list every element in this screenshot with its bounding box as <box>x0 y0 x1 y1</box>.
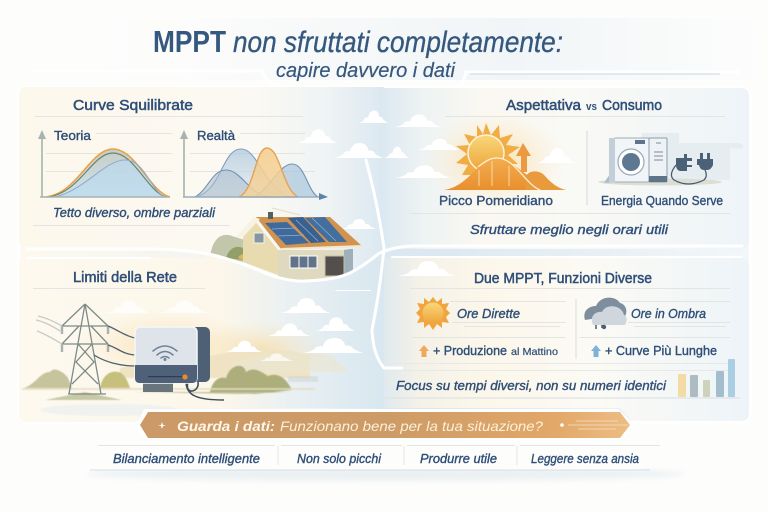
white dividing curves <box>27 160 742 368</box>
title: MPPT <box>153 24 226 59</box>
clouds: upper right <box>384 114 576 178</box>
heading: limiti della rete: Limiti della Rete <box>73 270 177 286</box>
landscape <box>22 349 350 416</box>
clouds: upper centre <box>297 110 388 229</box>
illustration: house with solar panels <box>205 208 378 290</box>
caption: focus su tempi diversi: Focus su tempi diversi, non su numeri identici <box>396 378 667 393</box>
banner: guarda i dati <box>136 409 634 440</box>
panel: curve squilibrate <box>19 87 384 281</box>
column: ore dirette <box>412 297 566 358</box>
icon: washer, appliance and plugs <box>598 133 743 186</box>
chart: small bars <box>678 359 735 397</box>
heading: curve squilibrate: Curve Squilibrate <box>73 98 193 114</box>
panel: due mppt <box>384 258 749 421</box>
label: ore dirette: Ore Dirette <box>457 306 520 321</box>
item: non solo picchi: Non solo picchi <box>297 451 382 466</box>
main panel backdrop <box>19 87 750 422</box>
item: leggere senza ansia: Leggere senza ansia <box>531 451 639 466</box>
icon: sun and hill <box>423 112 567 208</box>
icon: rain cloud <box>584 298 627 329</box>
label: produzione al mattino <box>433 343 558 358</box>
label: produzione al mattino: al Mattino <box>511 346 558 358</box>
text: banner message: Guarda i dati: <box>177 418 275 434</box>
chart: teoria <box>38 128 172 197</box>
clouds: lower left <box>105 272 372 361</box>
icon: orange arrow <box>419 345 429 357</box>
column: ore in ombra <box>580 298 730 358</box>
panel: limiti della rete <box>19 257 384 422</box>
caption: sfruttare meglio: Sfruttare meglio negli orari utili <box>470 222 669 237</box>
heading: due mppt: Due MPPT, Funzioni Diverse <box>474 271 652 287</box>
title: non sfruttati completamente: <box>233 26 563 59</box>
heading: aspettativa vs consumo: vs <box>586 101 597 113</box>
chart: realtà: Realtà <box>197 128 236 143</box>
item: bilanciamento intelligente: Bilanciamento intelligente <box>113 451 260 466</box>
panel: title plate <box>30 18 768 88</box>
chart: teoria: Teoria <box>54 128 92 143</box>
heading: aspettativa vs consumo: Consumo <box>602 98 662 114</box>
title <box>153 24 563 59</box>
caption: tetto diverso: Tetto diverso, ombre parziali <box>53 205 216 220</box>
icon: inverter with wifi <box>135 327 224 400</box>
label: produzione al mattino: + Produzione <box>433 343 507 358</box>
text: banner message: Funzionano bene per la tua situazione? <box>280 418 543 434</box>
item: produrre utile: Produrre utile <box>420 451 497 466</box>
icon: power pylon <box>36 304 135 394</box>
footer row: four key points <box>85 446 685 481</box>
cloud: top of panel <box>398 261 455 276</box>
heading: aspettativa vs consumo <box>506 98 662 114</box>
icon: sun <box>416 297 450 330</box>
panel: aspettativa vs consumo <box>380 88 749 249</box>
heading: aspettativa vs consumo: Aspettativa <box>506 98 582 114</box>
text: banner message <box>177 418 543 434</box>
label: picco pomeridiano: Picco Pomeridiano <box>439 193 553 208</box>
chart: realtà <box>180 128 328 200</box>
label: ore in ombra: Ore in Ombra <box>631 306 706 321</box>
label: energia quando serve: Energia Quando Serve <box>601 193 723 208</box>
label: curve più lunghe: + Curve Più Lunghe <box>605 343 717 358</box>
icon: blue arrow <box>591 345 601 357</box>
subtitle: capire davvero i dati <box>276 60 456 82</box>
